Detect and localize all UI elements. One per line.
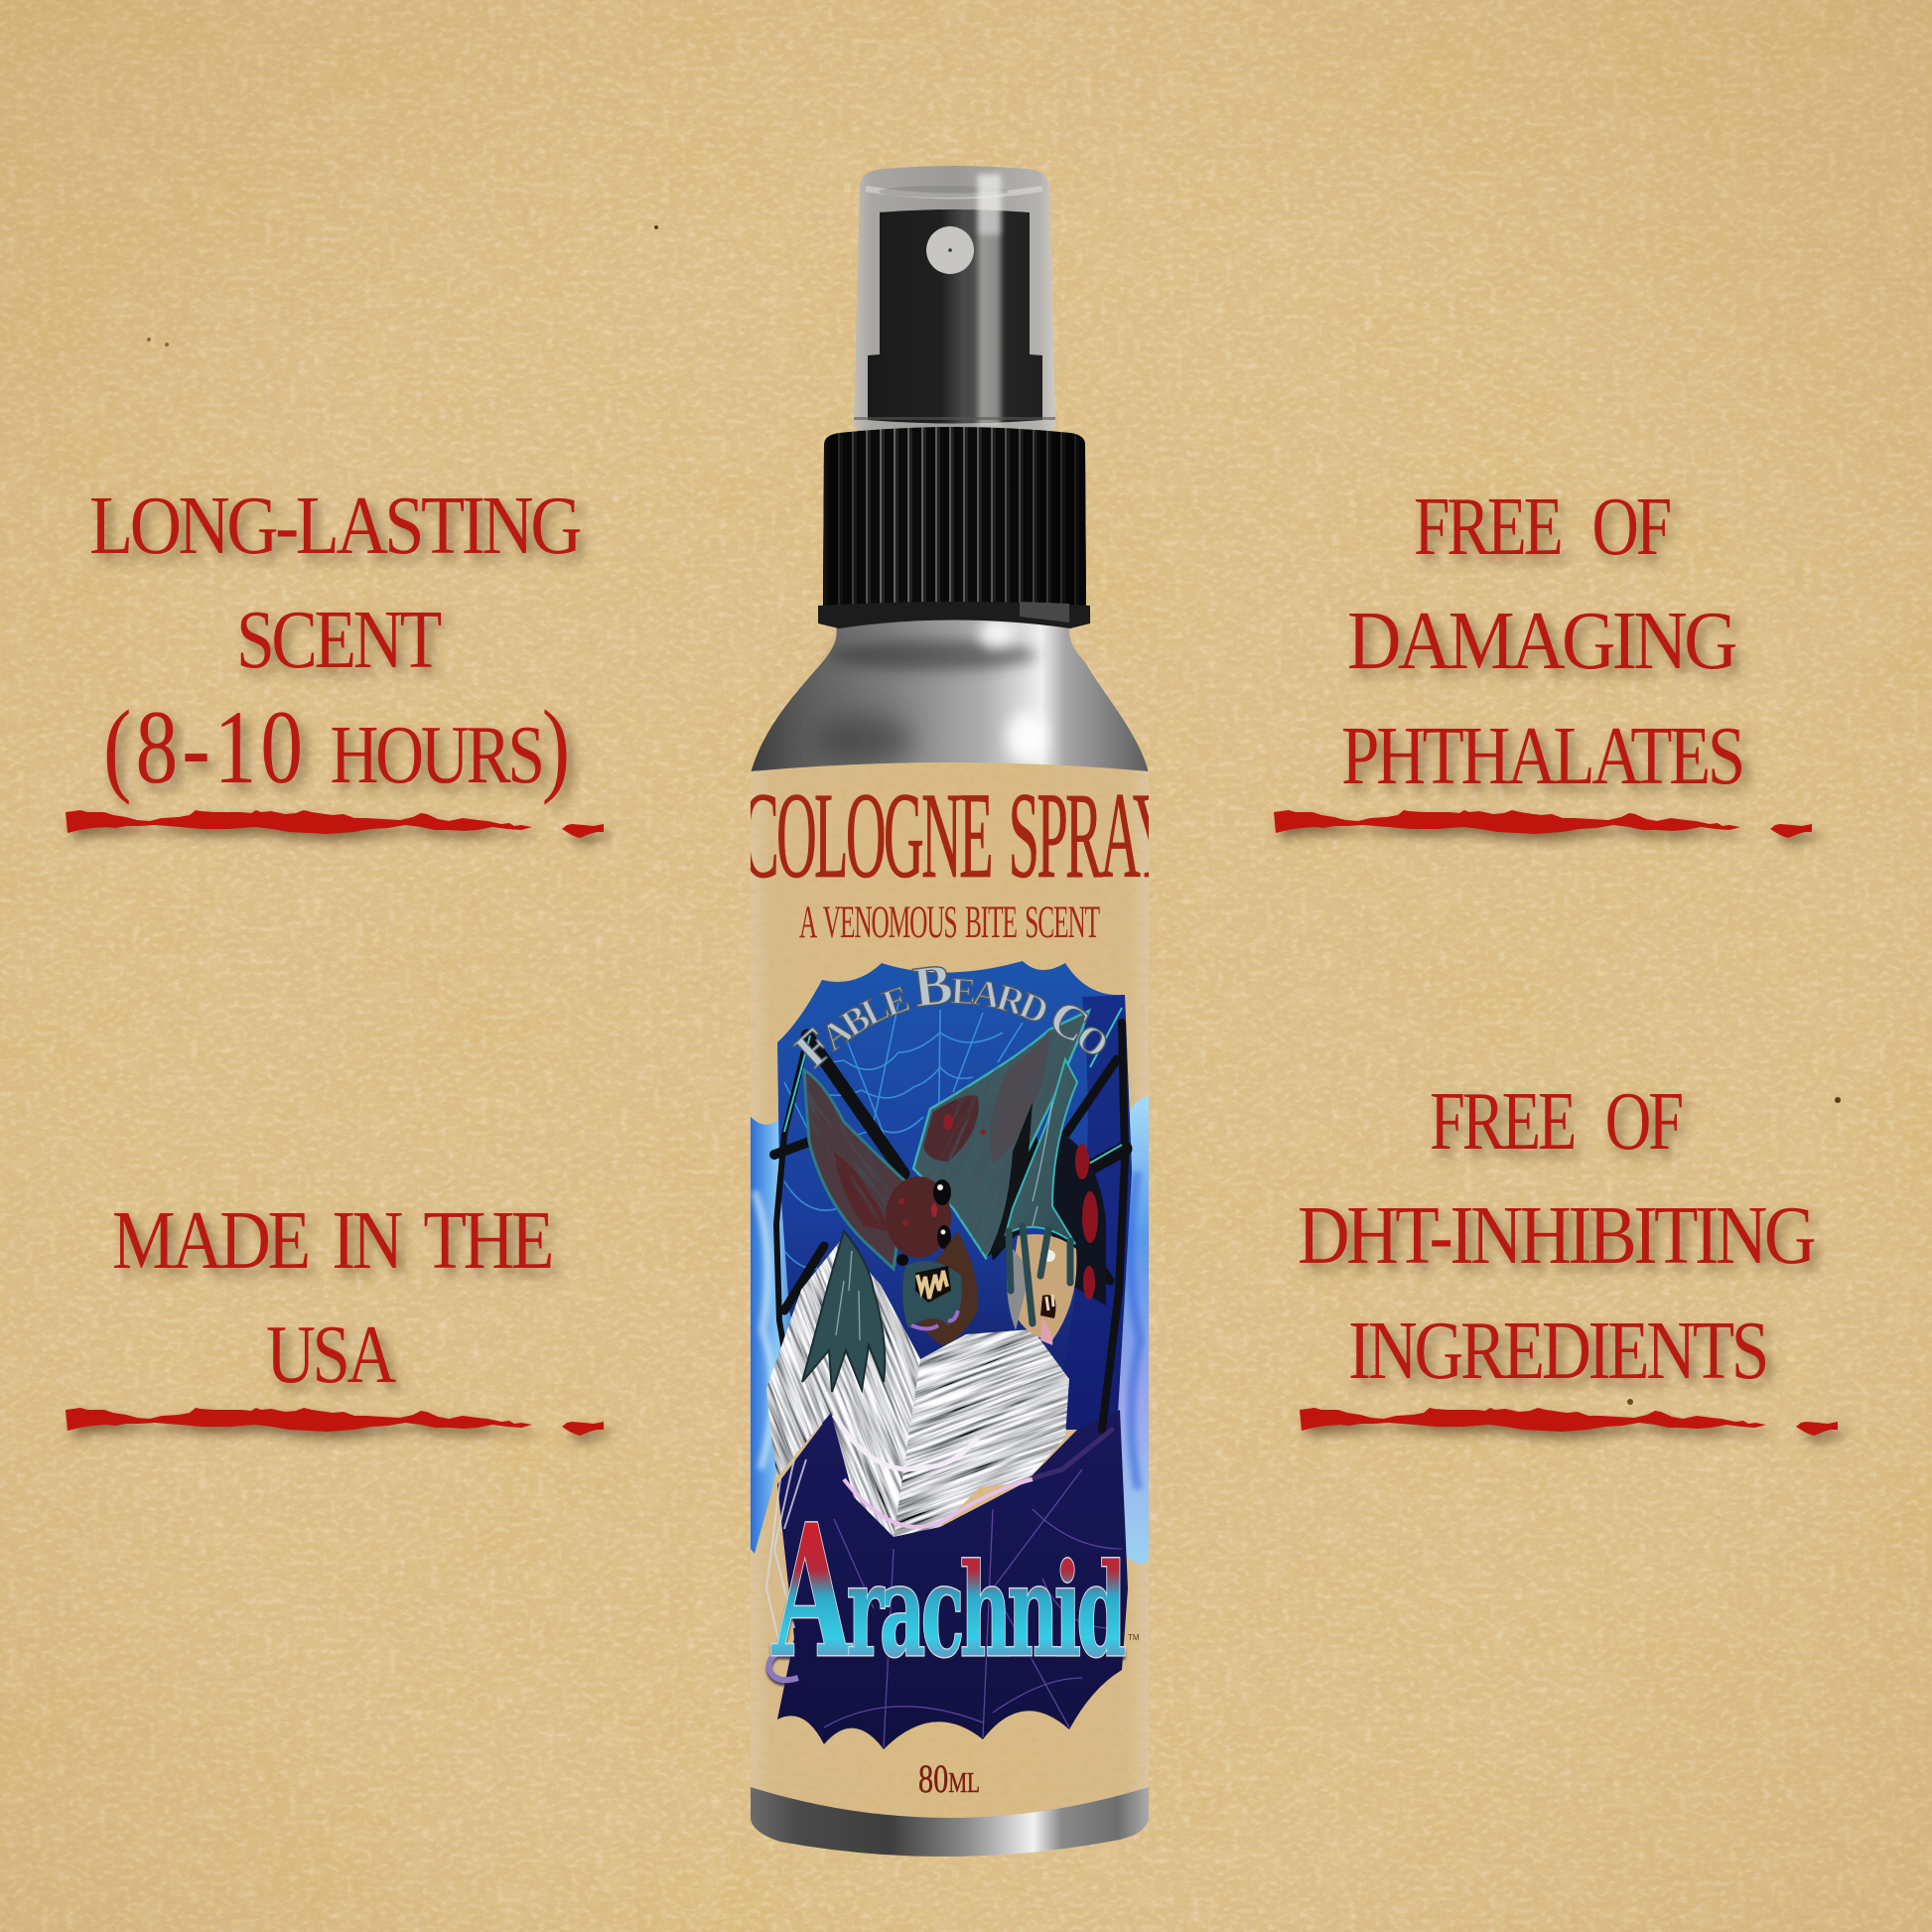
red abdomen <box>1042 1127 1106 1306</box>
callout: made in the USA: USA <box>266 1309 397 1401</box>
shoulder <box>751 608 1149 773</box>
callout: long-lasting scent <box>66 480 604 838</box>
product name: Arachnid <box>771 1485 1125 1699</box>
dark navy lower web <box>777 1410 1128 1749</box>
bottle <box>751 166 1149 1857</box>
ribbed black collar <box>818 427 1090 628</box>
callout: free of damaging phthalates: DAMAGING <box>1347 595 1736 687</box>
callout: free of DHT-inhibiting ingredients: DHT-INHIBITING <box>1298 1189 1815 1282</box>
base rim <box>751 1777 1149 1857</box>
clear overcap <box>854 166 1055 434</box>
spider left femur <box>802 1068 905 1272</box>
label subtitle: A VENOMOUS BITE SCENT <box>799 897 1100 948</box>
trademark: TM <box>1128 1633 1140 1642</box>
callout: made in the USA: MADE IN THE <box>112 1194 552 1287</box>
callout: long-lasting scent: SCENT <box>236 594 441 686</box>
spider left claw <box>802 1231 885 1392</box>
web strands <box>784 1003 1023 1330</box>
callout: made in the USA <box>66 1194 604 1436</box>
silk strands at lower left <box>766 1459 806 1648</box>
nozzle disc <box>926 226 974 274</box>
callout: long-lasting scent: LONG-LASTING <box>89 480 581 572</box>
callout: free of damaging phthalates <box>1274 481 1812 838</box>
blue ink right <box>1118 1096 1149 1565</box>
brand arc text: FABLE BEARD CO <box>792 966 1106 1070</box>
brush underline <box>1274 810 1812 838</box>
brush underline <box>66 810 604 838</box>
spider head <box>886 1176 951 1266</box>
wrapped cocoon <box>611 1169 1189 1622</box>
callout: free of DHT-inhibiting ingredients: INGREDIENTS <box>1348 1305 1766 1397</box>
spider right claw <box>1006 1059 1077 1323</box>
blue ink left <box>751 1117 791 1554</box>
text: COLOGNE SPRAY <box>742 767 1173 903</box>
paper label <box>751 762 1149 1818</box>
spider body and right leg <box>911 1009 1092 1261</box>
callout: free of damaging phthalates: PHTHALATES <box>1341 710 1742 802</box>
volume: 80ML <box>918 1756 980 1801</box>
callout: long-lasting scent: (8-10 HOURS) <box>103 689 567 805</box>
illustration: web, spider and cocoon <box>764 961 1140 1749</box>
callout: free of damaging phthalates: FREE OF <box>1414 481 1670 573</box>
brush underline <box>66 1408 604 1436</box>
callout: free of DHT-inhibiting ingredients: FREE OF <box>1430 1075 1682 1168</box>
product name <box>769 1485 1125 1699</box>
black actuator <box>868 209 1042 423</box>
callout: free of DHT-inhibiting ingredients <box>1298 1075 1838 1436</box>
victim face <box>1007 1234 1076 1345</box>
blue web backdrop <box>777 961 1132 1430</box>
black legs <box>774 1023 1125 1484</box>
spider fangs and hair <box>902 1231 978 1346</box>
brush underline <box>1300 1408 1838 1436</box>
